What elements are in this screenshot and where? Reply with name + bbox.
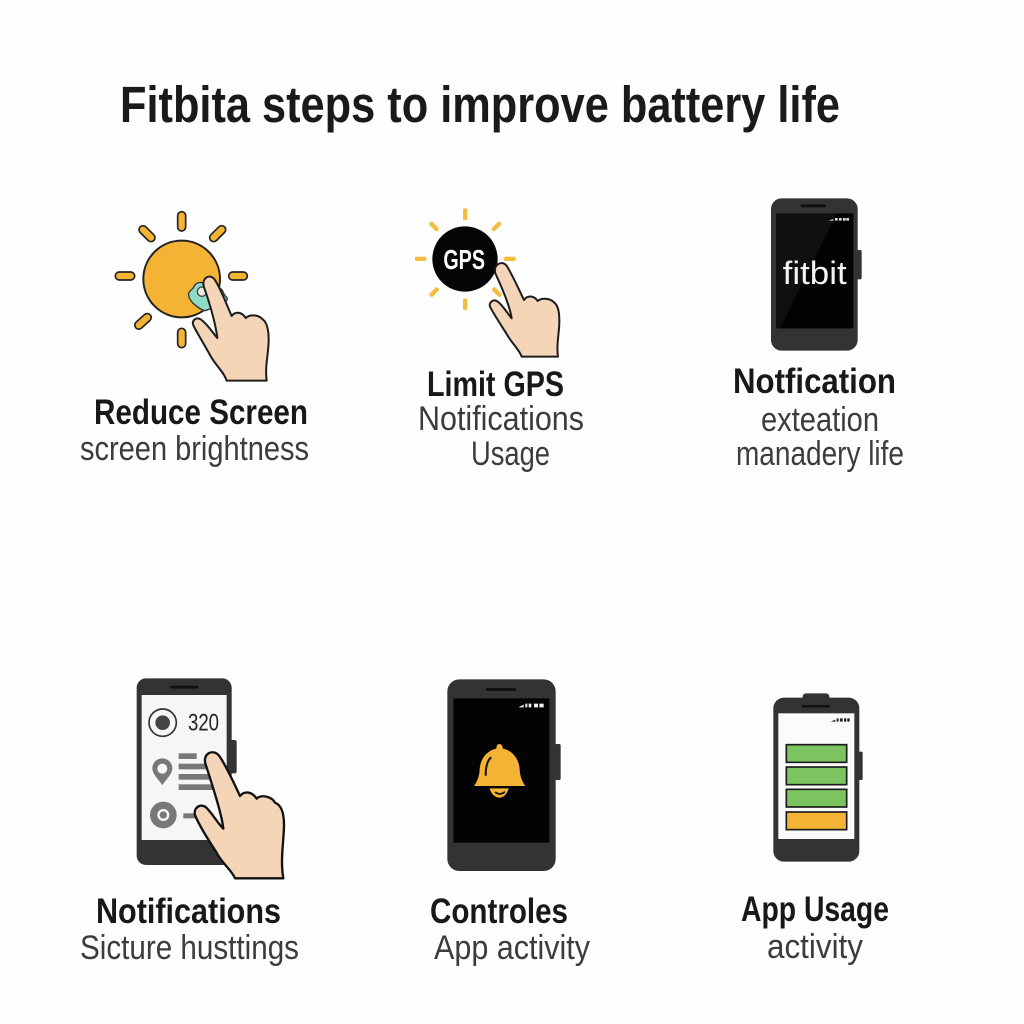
panel: controles (430, 679, 590, 967)
text: exteation manadery life (736, 401, 904, 473)
battery bar (786, 767, 847, 785)
text: sicture husttings: Sicture husttings (80, 929, 299, 967)
panel: notification (733, 198, 904, 473)
heading: reduce screen: Reduce Screen (94, 393, 308, 432)
battery bar low (786, 812, 847, 830)
icon: gps badge with tapping hand: GPS (443, 244, 485, 275)
text: notifications usage: Notifications (418, 400, 584, 438)
icon: phone with fitbit logo (771, 198, 862, 351)
battery bar (786, 789, 847, 807)
text: notifications usage (418, 400, 584, 473)
heading: limit gps: Limit GPS (427, 365, 564, 404)
bell glyph (474, 744, 525, 798)
icon: phone with battery bars (773, 693, 863, 862)
text: notifications usage: Usage (471, 435, 550, 473)
battery bar (786, 745, 847, 762)
panel: limit gps (415, 208, 584, 473)
heading: notfication: Notfication (733, 362, 896, 401)
heading: controles: Controles (430, 892, 568, 931)
heading: app usage: App Usage (741, 890, 889, 929)
title: Fitbita steps to improve battery life (120, 76, 840, 133)
icon: gps badge with tapping hand (415, 208, 559, 357)
icon: phone with bell (447, 679, 561, 871)
text: app activity: App activity (434, 929, 590, 967)
icon: phone with settings list and hand: 320 (188, 709, 219, 736)
text: screen brightness: screen brightness (80, 430, 309, 468)
icon: phone with fitbit logo: fitbit (783, 255, 847, 291)
text: exteation manadery life: manadery life (736, 435, 904, 473)
panel: notifications (80, 678, 299, 967)
heading: notifications: Notifications (96, 892, 281, 931)
text: activity: activity (767, 928, 863, 966)
icon: phone with settings list and hand (137, 678, 284, 878)
text: exteation manadery life: exteation (761, 401, 879, 439)
icon: sun with tapping hand (115, 212, 269, 381)
panel: reduce screen (80, 212, 309, 468)
panel: app usage (741, 693, 889, 966)
